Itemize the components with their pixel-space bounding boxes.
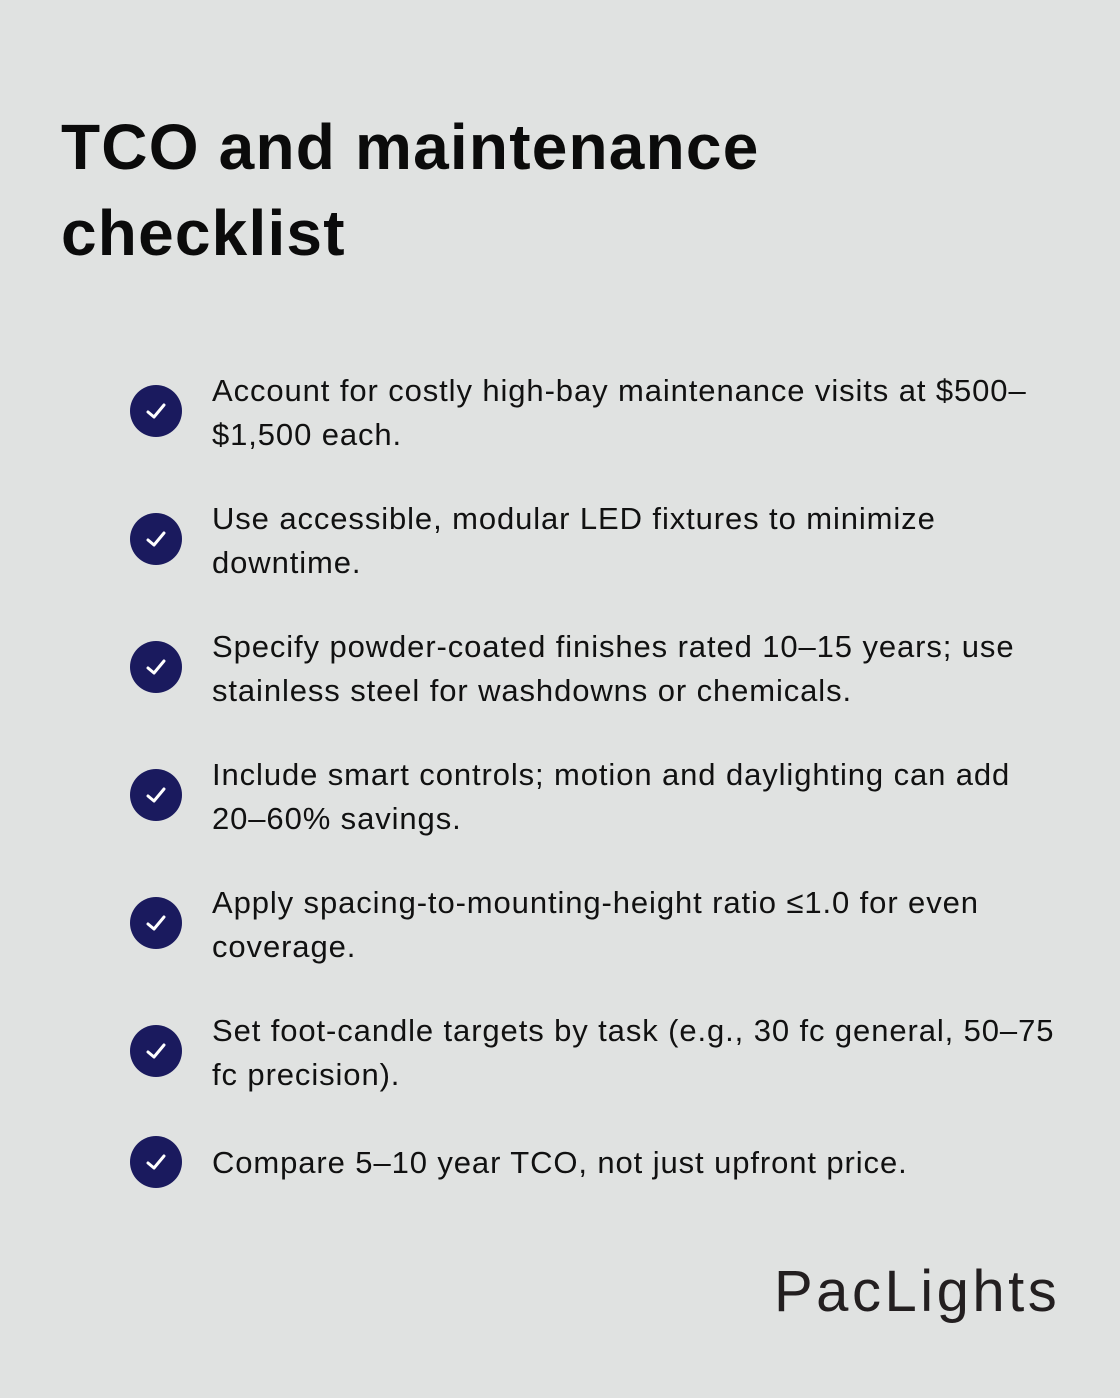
checklist item 5 (130, 885, 979, 964)
text: fc precision). (212, 1057, 400, 1092)
icon: check (130, 513, 182, 565)
text (212, 885, 979, 964)
checklist item 4 (130, 757, 1010, 836)
icon: check (130, 385, 182, 437)
text (212, 629, 1014, 708)
title: TCO and maintenance (61, 111, 760, 183)
checklist item 3 (130, 629, 1014, 708)
text: coverage. (212, 929, 356, 964)
icon: check (130, 897, 182, 949)
icon: check (130, 769, 182, 821)
text (212, 1013, 1054, 1092)
text (212, 757, 1010, 836)
text: $1,500 each. (212, 417, 402, 452)
checklist item 2 (130, 501, 936, 580)
text: Apply spacing-to-mounting-height ratio ≤1.0 for even (212, 885, 979, 920)
text: Specify powder-coated finishes rated 10–15 years; use (212, 629, 1014, 664)
text: Account for costly high-bay maintenance visits at $500– (212, 373, 1027, 408)
text: downtime. (212, 545, 361, 580)
icon: check (130, 641, 182, 693)
text (212, 501, 936, 580)
icon: check (130, 1025, 182, 1077)
text: Use accessible, modular LED fixtures to minimize (212, 501, 936, 536)
text (212, 373, 1027, 452)
checklist item 7 (130, 1136, 908, 1188)
checklist item 1 (130, 373, 1027, 452)
text: Set foot-candle targets by task (e.g., 30 fc general, 50–75 (212, 1013, 1054, 1048)
text: Include smart controls; motion and daylighting can add (212, 757, 1010, 792)
checklist item 6 (130, 1013, 1054, 1092)
title: checklist (61, 197, 346, 269)
logo: PacLights: PacLights (774, 1259, 1060, 1324)
title (61, 111, 760, 269)
text: Compare 5–10 year TCO, not just upfront price. (212, 1145, 908, 1180)
text: stainless steel for washdowns or chemicals. (212, 673, 852, 708)
icon: check (130, 1136, 182, 1188)
text: 20–60% savings. (212, 801, 462, 836)
